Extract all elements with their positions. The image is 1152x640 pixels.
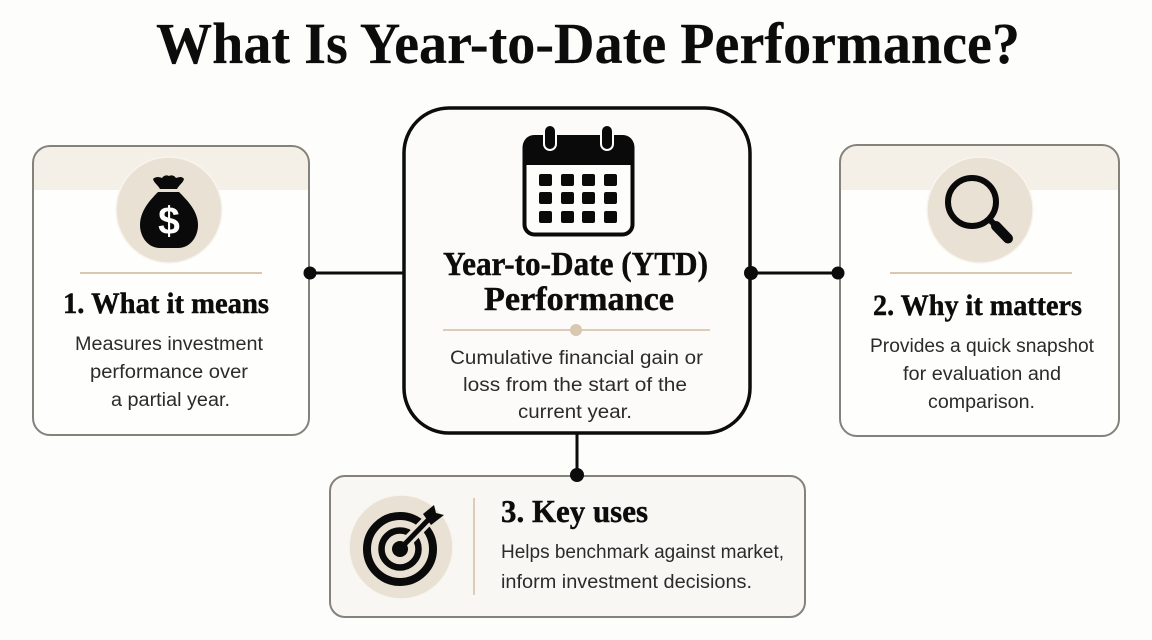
body text: Measures investment [75,334,264,355]
heading: Year-to-Date (YTD) [443,246,708,283]
icon: calendar [523,125,634,234]
body text [450,348,704,423]
connector: centre to right card [744,266,844,280]
body text: comparison. [928,392,1035,413]
divider [890,272,1072,274]
body text: Provides a quick snapshot [870,336,1095,357]
panel: key uses [330,476,805,617]
heading: 2. Why it matters [873,290,1082,322]
body text: loss from the start of the [463,375,687,396]
body text: current year. [518,402,632,423]
divider with dot [443,324,710,336]
divider [473,498,475,595]
connector: centre to bottom card [570,433,584,482]
body text [870,336,1095,413]
icon: magnifying glass [927,157,1033,263]
body text [501,542,784,593]
connector: left card to centre [304,266,404,280]
panel: why it matters [840,145,1119,436]
title: What Is Year-to-Date Performance? [156,11,1020,76]
icon: target with arrow [349,495,453,599]
body text: performance over [90,362,249,383]
body text: Cumulative financial gain or [450,348,704,369]
body text: Helps benchmark against market, [501,542,784,563]
body text [75,334,264,411]
heading: 3. Key uses [501,493,648,529]
body text: a partial year. [111,390,230,411]
body text: for evaluation and [903,364,1061,385]
panel: central definition [404,108,750,433]
heading [443,246,708,318]
icon: money bag [116,157,222,263]
icon: money bag: $ [158,200,180,243]
body text: inform investment decisions. [501,572,752,593]
divider [80,272,262,274]
panel: what it means [33,146,309,435]
heading: 1. What it means [63,288,269,320]
heading: Performance [484,281,674,318]
